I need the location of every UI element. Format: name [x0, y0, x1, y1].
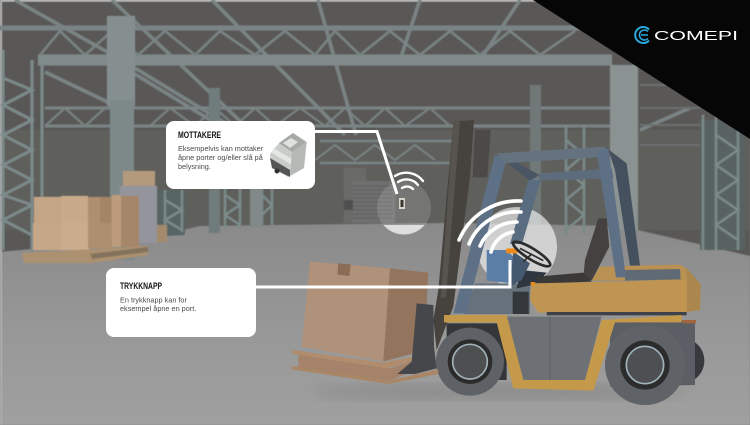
- pallet: [292, 350, 438, 384]
- carton on forks: [302, 262, 428, 361]
- card body text: Eksempelvis kan mottaker: [178, 144, 264, 153]
- cab frame, rear: [507, 149, 640, 266]
- connector: button: [256, 260, 510, 287]
- logo: Comepi: [635, 27, 738, 43]
- wheel wells: [447, 323, 507, 380]
- black corner banner: [533, 0, 750, 139]
- yellow trim: [444, 315, 682, 391]
- receiver device on wall: [399, 198, 405, 209]
- steering wheel: [510, 238, 553, 270]
- connector: receiver: [315, 132, 397, 194]
- dashboard: [487, 250, 530, 287]
- card: MOTTAKERE: [166, 121, 315, 189]
- wifi signal: receiver: [395, 173, 423, 189]
- operator compartment: [463, 270, 547, 314]
- icon: logo mark: [635, 27, 649, 43]
- rear wheel: [605, 325, 685, 405]
- card body text: åpne porter og/eller slå på: [178, 153, 264, 162]
- spotlight: receiver: [377, 181, 431, 235]
- wordmark: COMEPI: [654, 29, 738, 43]
- card body text: En trykknapp kan for: [120, 296, 187, 304]
- wifi signal: button: [459, 201, 521, 252]
- icon: DIN-rail receiver: [270, 133, 307, 177]
- cab frame, front: [453, 147, 626, 313]
- card body text: eksempel åpne en port.: [120, 304, 196, 313]
- front wheel: [436, 328, 504, 396]
- forklift with load: [292, 120, 704, 405]
- card heading: TRYKKNAPP: [120, 281, 162, 292]
- card heading: MOTTAKERE: [178, 130, 221, 141]
- push button: [506, 248, 518, 253]
- fork carriage: [397, 303, 437, 374]
- seat: [537, 218, 609, 284]
- card: TRYKKNAPP: [106, 268, 256, 337]
- counterweight: [530, 265, 701, 323]
- spotlight: button: [477, 207, 557, 287]
- lower body panel: [507, 317, 602, 381]
- card body text: belysning.: [178, 162, 211, 171]
- mast: [433, 120, 491, 350]
